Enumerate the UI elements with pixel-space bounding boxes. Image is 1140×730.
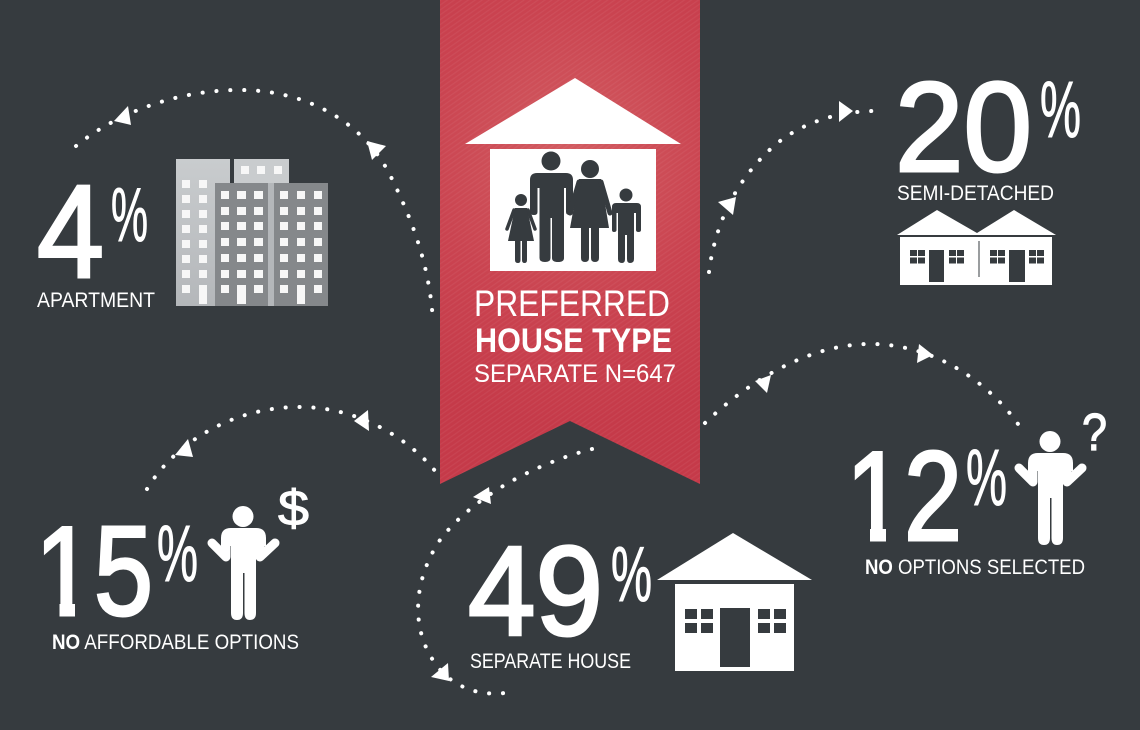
stat: 49% separate house: %: [611, 530, 652, 618]
stat: 4% apartment: APARTMENT: [37, 289, 155, 312]
stat: 12% no options selected: [846, 425, 1085, 579]
stat: 49% separate house: SEPARATE HOUSE: [470, 650, 631, 673]
arrow: dotted arc apartment: [76, 90, 433, 322]
arrow: dotted arc no options: [705, 344, 1022, 430]
arrow: dotted arc separate house: [418, 449, 592, 694]
heading: preferred house type: [474, 283, 676, 388]
stat: 20% semi-detached: SEMI-DETACHED: [897, 182, 1054, 205]
stat: 12% no options selected: NO OPTIONS SELECTED: [865, 556, 1085, 579]
stat: 4% apartment: [37, 158, 155, 312]
stat: 12% no options selected: 12: [846, 425, 962, 567]
heading: preferred house type: PREFERRED: [474, 283, 670, 324]
icon: family in house: [465, 78, 681, 271]
stat: 15% no affordable options: %: [157, 509, 198, 598]
stat: 12% no options selected: %: [966, 433, 1007, 522]
icon: semi-detached houses: [897, 210, 1056, 285]
icon: shrugging person with question mark: [1019, 404, 1107, 545]
stat: 15% no affordable options: 15: [35, 500, 153, 642]
icon: shrugging person with dollar: [212, 480, 309, 620]
stat: 15% no affordable options: [35, 500, 299, 654]
stat: 20% semi-detached: 20: [895, 56, 1032, 198]
heading: preferred house type: HOUSE TYPE: [475, 322, 672, 360]
icon: apartment buildings: [176, 159, 328, 306]
stat: 4% apartment: 4: [37, 158, 104, 305]
icon: shrugging person with question mark: ?: [1082, 404, 1107, 462]
panel: red ribbon: [440, 0, 700, 484]
stat: 49% separate house: 49: [468, 520, 603, 662]
icon: separate house: [657, 533, 812, 671]
stat: 4% apartment: %: [111, 173, 148, 258]
stat: 20% semi-detached: %: [1040, 65, 1081, 154]
arrow: dotted arc affordable: [147, 407, 436, 489]
stat: 15% no affordable options: NO AFFORDABLE OPTIONS: [52, 631, 299, 654]
heading: preferred house type: SEPARATE N=647: [474, 360, 676, 388]
arrow: dotted arc semi-detached: [709, 101, 882, 272]
icon: shrugging person with dollar: $: [278, 480, 309, 536]
